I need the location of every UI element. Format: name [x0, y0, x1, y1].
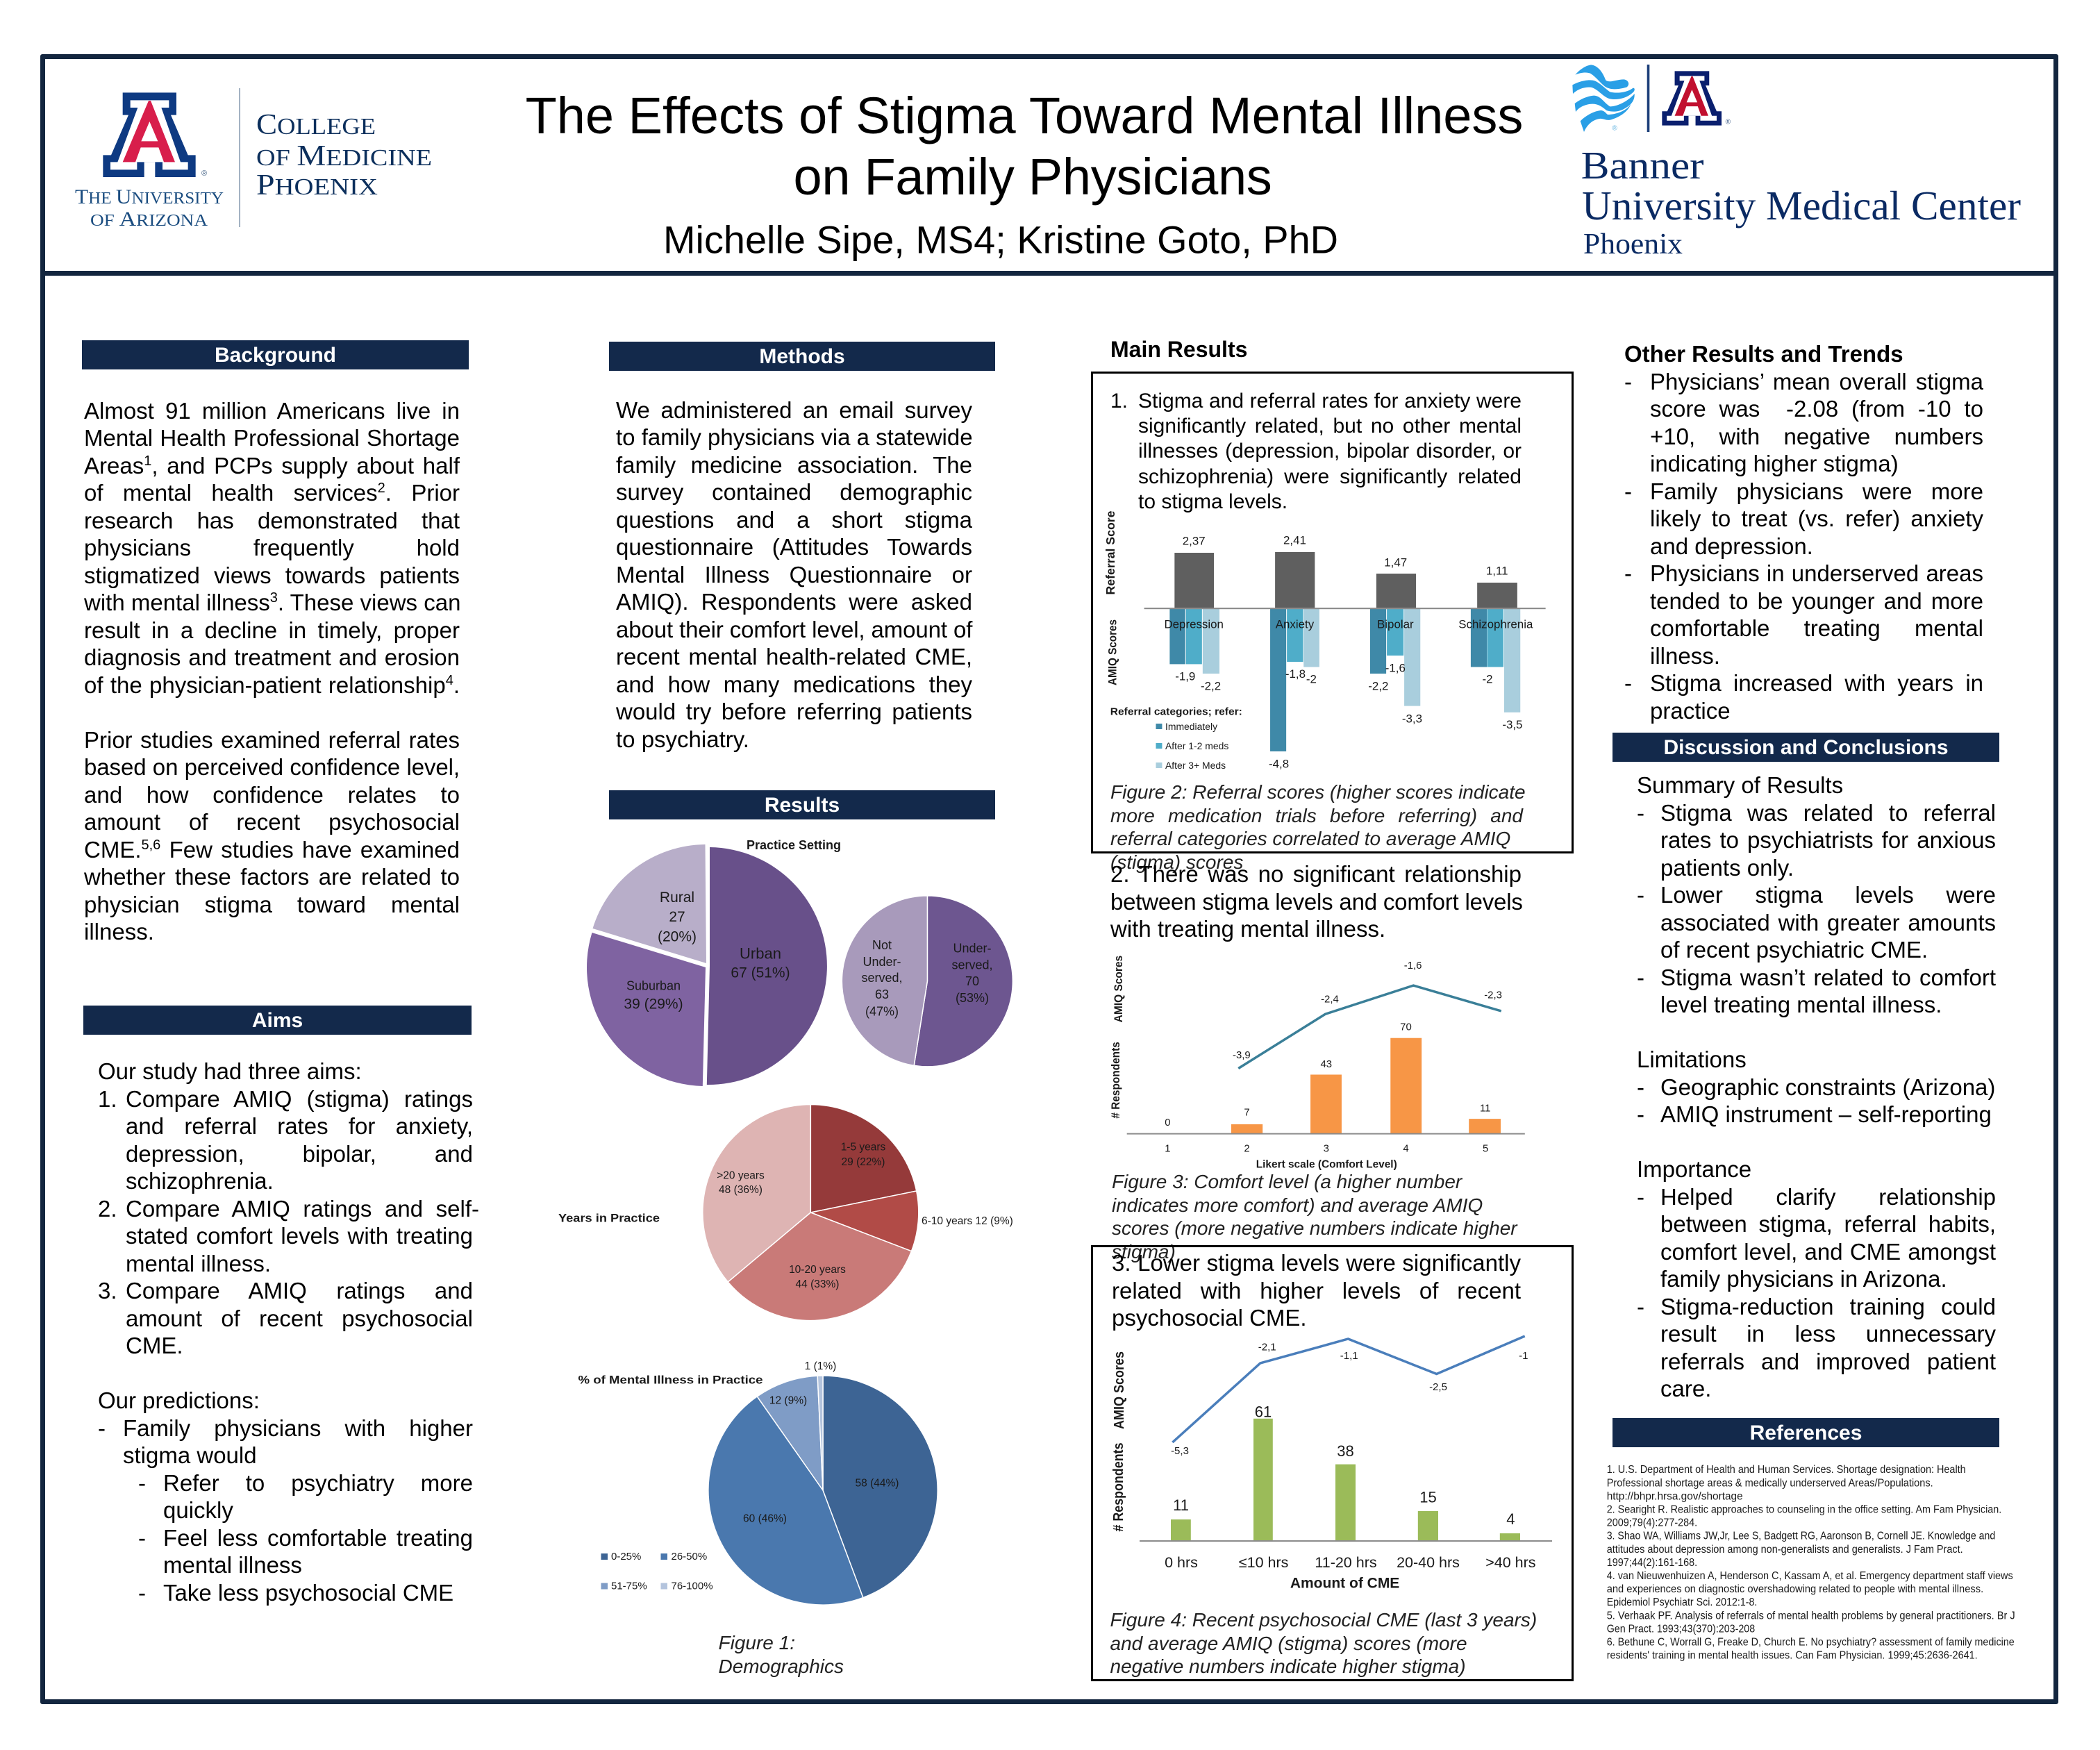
text: other results and trends: - [1624, 368, 1632, 394]
text: aims: and referral rates for anxiety, [126, 1113, 473, 1139]
text: aims: schizophrenia. [126, 1168, 274, 1194]
combo chart: comfort level: Likert scale (Comfort Level) [1256, 1158, 1397, 1170]
pie chart: underserved: served, [951, 958, 993, 972]
text: discussion and conclusions: of recent psychiatric CME. [1660, 937, 1928, 962]
legend: Referral categories; refer: [1110, 706, 1242, 718]
combo chart: comfort level: 3 [1324, 1142, 1329, 1154]
text: methods [616, 397, 973, 752]
combo chart: comfort level: 5 [1483, 1142, 1488, 1154]
text: aims: quickly [163, 1497, 233, 1523]
legend [601, 1551, 713, 1592]
combo chart: recent psychosocial CME: >40 hrs [1485, 1554, 1536, 1571]
logo: Banner University Medical Center Phoenix: ® [1726, 118, 1731, 126]
text: methods: recent mental health-related CME, [616, 644, 972, 669]
text: background: of mental health services2. Prior [84, 480, 460, 506]
text: other results and trends: tended to be younger and more [1650, 588, 1983, 614]
pie chart: underserved: 63 [875, 988, 889, 1001]
text: discussion and conclusions: level treating mental illness. [1660, 992, 1942, 1017]
text: discussion and conclusions: result in less unnecessary [1660, 1321, 1996, 1347]
text: discussion and conclusions: Stigma wasn’t related to comfort [1660, 964, 1996, 990]
caption: figure 4: and average AMIQ (stigma) scores (more [1110, 1632, 1467, 1654]
pie chart: practice setting: (20%) [658, 929, 697, 944]
text: references: Epidemiol Psychiatr Sci. 2012:1-8. [1607, 1597, 1757, 1608]
text: references: 2. Searight R. Realistic approaches to counseling in the office setting. Am Fam Physician. [1607, 1504, 2001, 1515]
text: background: research has demonstrated that [84, 507, 460, 533]
combo chart: recent psychosocial CME: 0 hrs [1165, 1554, 1198, 1571]
text: discussion and conclusions: Lower stigma levels were [1660, 882, 1996, 908]
pie chart: underserved: 70 [965, 974, 979, 988]
text: discussion and conclusions: referrals and improved patient [1660, 1349, 1996, 1374]
text: aims: - [138, 1469, 146, 1496]
pie chart: years in practice: 1-5 years [841, 1142, 886, 1153]
logo: University of Arizona College of Medicine Phoenix: OF MEDICINE [256, 140, 432, 172]
text: other results and trends: - [1624, 560, 1632, 586]
logo: University of Arizona College of Medicine Phoenix: OF ARIZONA [90, 208, 208, 231]
text: aims: stigma would [123, 1442, 257, 1468]
text: aims: - [138, 1579, 146, 1606]
text: result 2: 2. There was no significant relationship [1110, 861, 1522, 887]
caption: figure 2: Figure 2: Referral scores (higher scores indicate [1110, 781, 1526, 803]
combo chart: comfort level: 11 [1480, 1102, 1490, 1114]
text: methods: questionnaire (Attitudes Towards [616, 534, 972, 560]
text: references: Gen Pract. 1993;43(370):203-208 [1607, 1623, 1755, 1635]
text: methods: questions and a short stigma [616, 507, 972, 532]
pie chart: practice setting: Urban [740, 944, 781, 962]
text: background: physician stigma toward mental [84, 892, 460, 917]
text: discussion and conclusions: - [1637, 1101, 1644, 1127]
pie chart: practice setting [587, 838, 841, 1086]
pie chart: years in practice: 6-10 years 12 (9%) [922, 1215, 1013, 1227]
text: background: Almost 91 million Americans live in [84, 397, 460, 424]
text: other results and trends: and depression. [1650, 533, 1813, 558]
pie chart: practice setting: Suburban [626, 979, 681, 993]
text: background: based on perceived confidence level, [84, 754, 460, 780]
text: discussion and conclusions: - [1637, 882, 1644, 908]
heading: Aims [83, 1006, 472, 1035]
text: aims: Compare AMIQ ratings and self- [126, 1196, 479, 1221]
combo chart: comfort level [1109, 956, 1525, 1170]
text: other results and trends [1624, 341, 1983, 724]
combo chart: comfort level: 1 [1165, 1142, 1171, 1154]
caption: figure 2: referral categories correlated to average AMIQ [1110, 828, 1510, 849]
text: background: Mental Health Professional Shortage [84, 425, 460, 451]
text: aims: mental illness [163, 1552, 302, 1578]
text: methods: to psychiatry. [616, 726, 749, 751]
bar chart: referral scores and AMIQ scores: 1,11 [1486, 564, 1508, 578]
text: result 1: 1. [1110, 390, 1128, 412]
caption: figure 1: Figure 1: [718, 1632, 795, 1653]
combo chart: recent psychosocial CME: Amount of CME [1290, 1575, 1399, 1592]
text: methods: and how many medications they [616, 671, 972, 697]
text: aims: amount of recent psychosocial [126, 1306, 473, 1331]
pie chart: underserved: Not [872, 938, 892, 952]
text: discussion and conclusions: Helped clarify relationship [1660, 1183, 1996, 1210]
text: aims: mental illness. [126, 1250, 271, 1276]
logo: Banner University Medical Center Phoenix: Phoenix [1583, 228, 1683, 260]
text: aims: CME. [126, 1333, 183, 1358]
caption: figure 3: scores (more negative numbers indicate higher [1112, 1217, 1517, 1239]
text: other results and trends: practice [1650, 697, 1731, 724]
text: references: http://bhpr.hrsa.gov/shortage [1607, 1490, 1743, 1502]
text: other results and trends: Physicians in underserved areas [1650, 560, 1983, 586]
text: result 2: with treating mental illness. [1110, 916, 1385, 942]
text: result 1: Stigma and referral rates for anxiety were [1138, 390, 1522, 412]
pie chart: underserved: Under- [862, 955, 901, 969]
text: references: 5. Verhaak PF. Analysis of referrals of mental health problems by general practitioners. Br J [1607, 1610, 2015, 1622]
text: other results and trends: illness. [1650, 643, 1720, 668]
combo chart: comfort level: -2,4 [1321, 994, 1339, 1006]
text: result 2 [1110, 861, 1523, 942]
combo chart: comfort level: -2,3 [1484, 990, 1502, 1001]
text: result 3: related with higher levels of recent [1112, 1278, 1521, 1303]
bar chart: referral scores and AMIQ scores: 2,37 [1183, 534, 1206, 548]
text: background: diagnosis and treatment and erosion [84, 644, 460, 670]
text: discussion and conclusions: AMIQ instrument – self-reporting [1660, 1101, 1992, 1127]
pie chart: years in practice: Years in Practice [558, 1211, 660, 1225]
pie chart: percent of mental illness in practice: 12 (9%) [769, 1394, 807, 1407]
bar chart: referral scores and AMIQ scores: -4,8 [1269, 757, 1289, 771]
pie chart: underserved: Under- [953, 942, 992, 956]
combo chart: comfort level: 0 [1165, 1117, 1171, 1128]
bar chart: referral scores and AMIQ scores: Anxiety [1276, 617, 1315, 631]
pie chart: practice setting: Rural [660, 890, 694, 906]
text: result 1: to stigma levels. [1138, 490, 1288, 513]
pie chart: practice setting: Practice Setting [747, 838, 841, 852]
text: discussion and conclusions: family physicians in Arizona. [1660, 1266, 1947, 1292]
combo chart: recent psychosocial CME: -1 [1519, 1350, 1528, 1362]
bar chart: referral scores and AMIQ scores: -1,6 [1385, 661, 1406, 675]
text: references: 6. Bethune C, Worrall G, Freake D, Church E. No psychiatry? assessment of family medicine [1607, 1636, 2015, 1649]
text: aims: 2. [98, 1196, 117, 1221]
heading: Results [609, 790, 995, 819]
combo chart: recent psychosocial CME [1111, 1335, 1552, 1592]
text: aims: depression, bipolar, and [126, 1140, 473, 1167]
text: background: whether these factors are related to [84, 864, 460, 890]
combo chart: recent psychosocial CME: -5,3 [1171, 1445, 1189, 1457]
heading: references: References [1750, 1422, 1862, 1444]
text: discussion and conclusions: - [1637, 800, 1644, 825]
heading: discussion and conclusions [1612, 733, 1999, 762]
text: discussion and conclusions: - [1637, 964, 1644, 990]
title: on Family Physicians [793, 148, 1272, 206]
text: methods: We administered an email survey [616, 397, 972, 422]
legend: After 3+ Meds [1165, 760, 1226, 771]
bar chart: referral scores and AMIQ scores: -2 [1483, 672, 1493, 686]
panel: result 3 [1091, 1244, 1574, 1681]
text: result 3: 3. Lower stigma levels were significantly [1112, 1250, 1521, 1276]
text: background: CME.5,6 Few studies have examined [84, 836, 460, 862]
logo: University of Arizona College of Medicine Phoenix: ® [201, 169, 207, 178]
text: aims: Our study had three aims: [98, 1058, 362, 1084]
combo chart: recent psychosocial CME: 15 [1419, 1489, 1437, 1506]
authors: Michelle Sipe, MS4; Kristine Goto, PhD [663, 218, 1338, 261]
heading: discussion and conclusions: Discussion and Conclusions [1663, 736, 1949, 759]
text: result 1: schizophrenia) were significantly related [1138, 465, 1522, 488]
text: discussion and conclusions: comfort level, and CME amongst [1660, 1239, 1996, 1264]
text: background: amount of recent psychosocial [84, 809, 460, 835]
text: references: 4. van Nieuwenhuizen A, Henderson C, Kassam A, et al. Emergency department staff views [1607, 1570, 2013, 1582]
heading: Background: Background [215, 344, 336, 367]
heading: Methods [609, 342, 995, 371]
pie chart: percent of mental illness in practice: % of Mental Illness in Practice [578, 1374, 762, 1386]
heading: Methods: Methods [759, 345, 845, 368]
text: discussion and conclusions: care. [1660, 1376, 1711, 1401]
text: other results and trends: likely to treat (vs. refer) anxiety [1650, 506, 1983, 531]
combo chart: recent psychosocial CME: 11 [1173, 1497, 1189, 1514]
combo chart: recent psychosocial CME: 61 [1255, 1403, 1272, 1421]
combo chart: comfort level: 43 [1320, 1058, 1332, 1070]
combo chart: comfort level: 70 [1400, 1021, 1412, 1033]
text: background: with mental illness3. These views can [84, 590, 460, 615]
title: The Effects of Stigma Toward Mental Illness [526, 87, 1523, 144]
bar chart: referral scores and AMIQ scores: -2 [1306, 672, 1317, 686]
combo chart: recent psychosocial CME: 4 [1506, 1510, 1515, 1528]
bar chart: referral scores and AMIQ scores: AMIQ Scores [1106, 619, 1119, 685]
bar chart: referral scores and AMIQ scores: -1,9 [1175, 669, 1195, 683]
combo chart: recent psychosocial CME: # Respondents [1111, 1443, 1126, 1532]
text: background: and how confidence relates to [84, 782, 460, 807]
text: discussion and conclusions: rates to psychiatrists for anxious [1660, 827, 1996, 853]
combo chart: recent psychosocial CME: ≤10 hrs [1239, 1554, 1288, 1571]
text: background: of the physician-patient relationship4. [84, 672, 460, 697]
pie chart: underserved: (47%) [865, 1004, 899, 1018]
combo chart: comfort level: -1,6 [1404, 960, 1422, 972]
caption: figure 4: negative numbers indicate higher stigma) [1110, 1656, 1466, 1677]
text: background [84, 397, 460, 944]
bar chart: referral scores and AMIQ scores: Depression [1164, 617, 1224, 631]
bar chart: referral scores and AMIQ scores: -2,2 [1368, 679, 1388, 693]
text: aims: Our predictions: [98, 1388, 260, 1413]
caption: figure 3: indicates more comfort) and average AMIQ [1112, 1194, 1483, 1215]
text: methods: Mental Illness Questionnaire or [616, 561, 972, 588]
text: other results and trends: - [1624, 478, 1632, 504]
text: methods: family medicine association. The [616, 451, 972, 478]
heading: Background [82, 340, 469, 369]
text: background: illness. [84, 919, 154, 944]
text: aims: Feel less comfortable treating [163, 1525, 473, 1550]
bar chart: referral scores and AMIQ scores: 1,47 [1384, 556, 1407, 569]
logo: Banner University Medical Center Phoenix: Banner [1581, 144, 1704, 188]
text: aims: Compare AMIQ (stigma) ratings [126, 1086, 473, 1111]
logo: Banner University Medical Center Phoenix: University Medical Center [1582, 183, 2021, 228]
combo chart: recent psychosocial CME: 38 [1337, 1442, 1354, 1460]
text: discussion and conclusions: associated with greater amounts [1660, 910, 1996, 935]
pie chart: underserved: (53%) [956, 991, 989, 1005]
text: references [1607, 1464, 2015, 1662]
text: background: Prior studies examined referral rates [84, 726, 460, 753]
logo: Banner University Medical Center Phoenix [1572, 65, 2021, 260]
combo chart: recent psychosocial CME: -1,1 [1340, 1350, 1358, 1362]
bar chart: referral scores and AMIQ scores: 2,41 [1283, 533, 1306, 547]
pie chart: years in practice: 48 (36%) [719, 1184, 762, 1196]
bar chart: referral scores and AMIQ scores [1103, 510, 1546, 771]
text: methods: survey contained demographic [616, 479, 972, 505]
text: other results and trends: +10, with negative numbers [1650, 424, 1983, 449]
text: background: Areas1, and PCPs supply about half [84, 453, 460, 478]
text: discussion and conclusions: patients only. [1660, 854, 1794, 881]
pie chart: underserved: served, [861, 971, 903, 985]
logo: University of Arizona College of Medicine Phoenix: THE UNIVERSITY [75, 185, 224, 208]
text: result 1 [1110, 390, 1522, 513]
legend: After 1-2 meds [1165, 740, 1228, 751]
heading: main results: Main Results [1110, 337, 1247, 362]
text: background: physicians frequently hold [84, 535, 460, 560]
text: references: Professional shortage areas & medically underserved Areas/Populations. [1607, 1477, 1933, 1489]
text: references: and experiences on diagnostic overshadowing related to people with mental illness. [1607, 1583, 1983, 1595]
text: other results and trends: Stigma increased with years in [1650, 670, 1983, 696]
combo chart: recent psychosocial CME: 20-40 hrs [1397, 1554, 1460, 1571]
pie chart: underserved [842, 896, 1012, 1067]
text: aims: 1. [98, 1086, 117, 1111]
logo: Banner University Medical Center Phoenix: ® [1612, 125, 1617, 132]
text: aims: - [98, 1415, 106, 1440]
pie chart: percent of mental illness in practice: 1 (1%) [805, 1360, 836, 1372]
pie chart: years in practice: 29 (22%) [842, 1156, 885, 1168]
text: methods: to family physicians via a statewide [616, 424, 973, 450]
text: aims: 3. [98, 1278, 117, 1303]
caption: figure 1 [718, 1632, 844, 1677]
caption: figure 4 [1110, 1609, 1537, 1677]
logo: University of Arizona College of Medicine Phoenix [75, 88, 432, 231]
text: discussion and conclusions: Limitations [1637, 1047, 1747, 1072]
text: aims: - [138, 1525, 146, 1550]
legend [1110, 706, 1242, 771]
text: references: 2009;79(4):277-284. [1607, 1517, 1697, 1529]
text: methods: about their comfort level, amount of [616, 617, 972, 642]
text: discussion and conclusions: - [1637, 1293, 1644, 1319]
heading: Results: Results [765, 794, 840, 817]
text: aims: Family physicians with higher [123, 1415, 473, 1440]
text: aims: Compare AMIQ ratings and [126, 1278, 473, 1303]
text: discussion and conclusions: between stigma, referral habits, [1660, 1211, 1996, 1237]
text: discussion and conclusions: Stigma-reduction training could [1660, 1293, 1996, 1319]
text: aims: Refer to psychiatry more [163, 1469, 473, 1496]
logo: University of Arizona College of Medicine Phoenix: PHOENIX [256, 169, 378, 201]
text: result 3 [1112, 1250, 1521, 1331]
text: background: result in a decline in timely, proper [84, 617, 460, 643]
combo chart: recent psychosocial CME: -2,1 [1258, 1342, 1276, 1353]
text: background: stigmatized views towards patients [84, 562, 460, 588]
text: discussion and conclusions: - [1637, 1074, 1644, 1100]
text: other results and trends: Physicians’ mean overall stigma [1650, 368, 1983, 394]
combo chart: comfort level: 2 [1244, 1142, 1250, 1154]
text: aims [98, 1058, 479, 1606]
combo chart: comfort level: # Respondents [1109, 1042, 1122, 1119]
text: discussion and conclusions [1637, 772, 1996, 1401]
combo chart: recent psychosocial CME: 11-20 hrs [1315, 1554, 1377, 1571]
bar chart: referral scores and AMIQ scores: Schizophrenia [1458, 617, 1533, 631]
text: discussion and conclusions: - [1637, 1183, 1644, 1210]
legend: 26-50% [671, 1551, 707, 1562]
text: discussion and conclusions: Stigma was related to referral [1660, 800, 1996, 825]
heading: references [1612, 1418, 1999, 1447]
heading: Aims: Aims [252, 1009, 303, 1032]
logo: University of Arizona College of Medicine Phoenix: COLLEGE [256, 109, 376, 141]
pie chart: years in practice: >20 years [717, 1169, 765, 1182]
combo chart: recent psychosocial CME: AMIQ Scores [1112, 1351, 1127, 1429]
text: aims: Take less psychosocial CME [163, 1579, 453, 1606]
text: other results and trends: score was -2.08 (from -10 to [1650, 396, 1983, 422]
text: references: 3. Shao WA, Williams JW,Jr, Lee S, Badgett RG, Aaronson B, Cornell JE. Knowledge and [1607, 1531, 1995, 1542]
pie chart: years in practice [558, 1105, 1013, 1320]
title [526, 87, 1523, 206]
combo chart: comfort level: 4 [1403, 1142, 1409, 1154]
text: methods: would try before referring patients [616, 699, 972, 724]
pie chart: practice setting: 27 [669, 909, 685, 925]
text: references: residents' training in mental health issues. Can Fam Physician. 1999;45:2636-2641. [1607, 1650, 1978, 1662]
caption: figure 3 [1112, 1171, 1518, 1262]
bar chart: referral scores and AMIQ scores: Bipolar [1377, 617, 1414, 631]
pie chart: years in practice: 44 (33%) [796, 1278, 839, 1290]
text: other results and trends: - [1624, 670, 1632, 696]
bar chart: referral scores and AMIQ scores: -3,5 [1502, 718, 1522, 731]
text: discussion and conclusions: Geographic constraints (Arizona) [1660, 1074, 1995, 1100]
text: discussion and conclusions: Summary of Results [1637, 772, 1843, 798]
pie chart: percent of mental illness in practice: 58 (44%) [856, 1478, 899, 1489]
pie chart: practice setting: 39 (29%) [624, 996, 683, 1012]
text: result 1: significantly related, but no other mental [1138, 415, 1522, 438]
text: references: 1997;44(2):161-168. [1607, 1557, 1697, 1569]
panel: result 1 [1091, 372, 1574, 853]
legend: Immediately [1165, 721, 1217, 732]
text: references: attitudes about depression among non-generalists and generalists. J Fam Pract. [1607, 1544, 1963, 1556]
combo chart: comfort level: AMIQ Scores [1112, 956, 1125, 1022]
bar chart: referral scores and AMIQ scores: -2,2 [1201, 679, 1221, 693]
text: methods: AMIQ). Respondents were asked [616, 589, 972, 615]
caption: figure 4: Figure 4: Recent psychosocial CME (last 3 years) [1110, 1609, 1537, 1631]
legend: 51-75% [611, 1581, 647, 1592]
caption: figure 2: more medication trials before referring) and [1110, 804, 1523, 826]
text: other results and trends: indicating higher stigma) [1650, 451, 1899, 476]
text: references: 1. U.S. Department of Health and Human Services. Shortage designation: Health [1607, 1464, 1966, 1476]
header divider [40, 271, 2058, 276]
text: other results and trends: comfortable treating mental [1650, 615, 1983, 641]
bar chart: referral scores and AMIQ scores: Referral Score [1103, 510, 1117, 594]
bar chart: referral scores and AMIQ scores: -1,8 [1285, 667, 1306, 681]
caption: figure 3: Figure 3: Comfort level (a higher number [1112, 1171, 1462, 1192]
text: aims: stated comfort levels with treating [126, 1223, 473, 1249]
text: result 3: psychosocial CME. [1112, 1305, 1307, 1331]
combo chart: comfort level: 7 [1244, 1107, 1250, 1119]
text: result 1: illnesses (depression, bipolar disorder, or [1138, 440, 1522, 462]
caption: figure 1: Demographics [718, 1656, 844, 1676]
caption: figure 3: stigma) [1112, 1240, 1176, 1262]
bar chart: referral scores and AMIQ scores: -3,3 [1402, 712, 1422, 726]
pie chart: percent of mental illness in practice: 60 (46%) [743, 1512, 787, 1525]
text: result 2: between stigma levels and comfort levels [1110, 889, 1523, 914]
caption: figure 2: (stigma) scores [1110, 851, 1243, 872]
pie chart: practice setting: 67 (51%) [731, 965, 790, 981]
pie chart: percent of mental illness in practice [578, 1360, 938, 1604]
combo chart: recent psychosocial CME: -2,5 [1429, 1381, 1447, 1393]
combo chart: comfort level: -3,9 [1233, 1049, 1251, 1061]
caption: figure 2 [1110, 781, 1526, 873]
text: other results and trends: Family physicians were more [1650, 478, 1983, 504]
legend: 76-100% [671, 1581, 713, 1592]
text: other results and trends: Other Results and Trends [1624, 341, 1903, 367]
legend: 0-25% [611, 1551, 641, 1562]
text: discussion and conclusions: Importance [1637, 1156, 1751, 1182]
pie chart: years in practice: 10-20 years [789, 1264, 846, 1276]
